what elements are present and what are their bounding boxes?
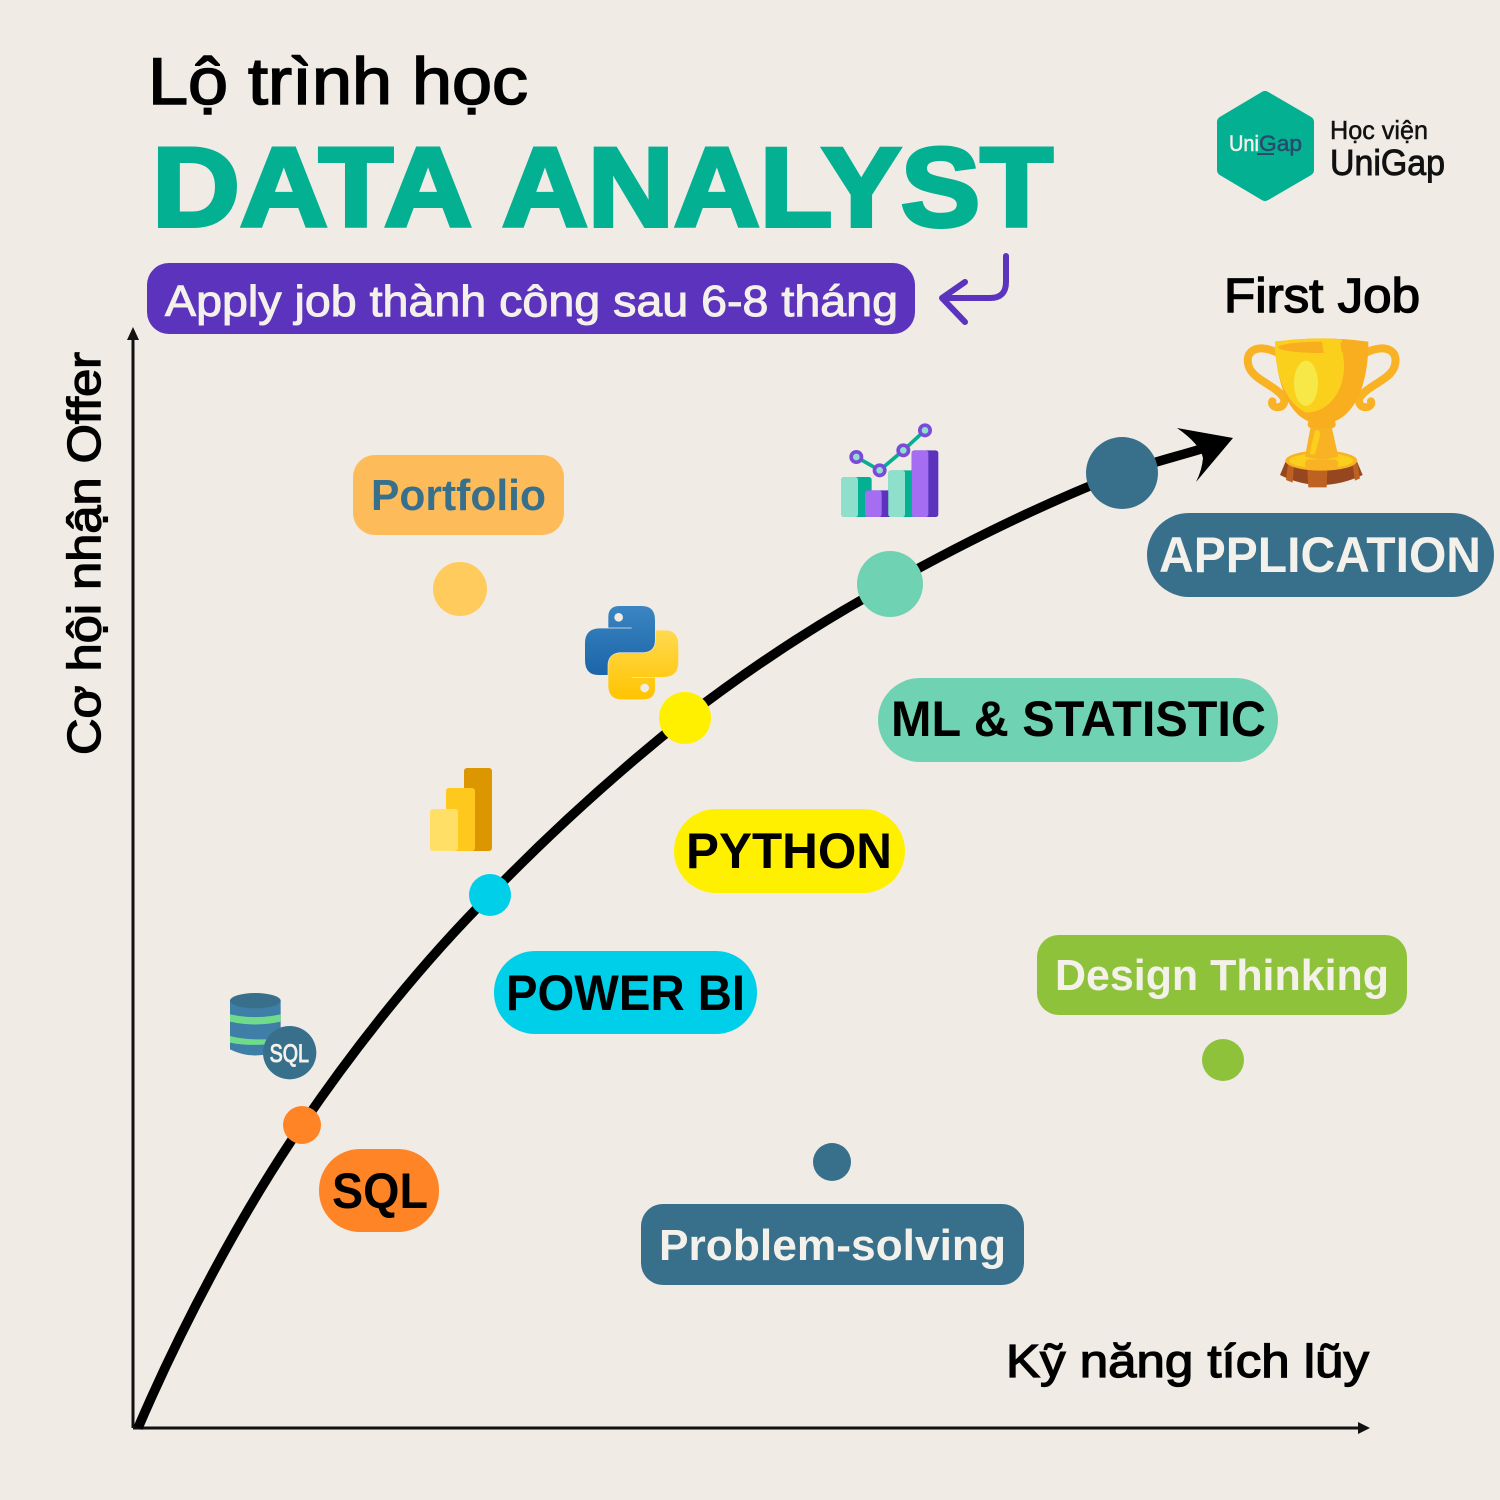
- soft skill: Problem-solving: Problem-solving: [659, 1221, 1006, 1270]
- label: ML & STATISTIC: [878, 678, 1278, 762]
- node: Power BI: [430, 768, 757, 1034]
- icon: Python: [585, 606, 678, 699]
- label: PYTHON: [674, 809, 905, 893]
- label: PYTHON: PYTHON: [686, 823, 892, 879]
- node: SQL: [230, 993, 439, 1232]
- arrowhead: [1177, 428, 1233, 482]
- growth curve arrow: [138, 428, 1233, 1428]
- logo: UniGap: UniGap: [1330, 142, 1445, 183]
- callout: apply job: [147, 263, 915, 334]
- y axis label: Cơ hội nhận Offer: [58, 352, 110, 755]
- label: SQL: [319, 1149, 439, 1232]
- label: POWER BI: [494, 951, 757, 1034]
- icon: trophy: [1248, 338, 1396, 487]
- node: ML and Statistic: [841, 423, 1278, 762]
- x axis label: Kỹ năng tích lũy: [1006, 1335, 1369, 1387]
- soft skill: Design Thinking: [1037, 935, 1407, 1081]
- title: [148, 44, 1053, 250]
- logo: UniGap: Gap: [1259, 131, 1302, 156]
- label: POWER BI: POWER BI: [506, 965, 745, 1021]
- y axis: [58, 327, 139, 1428]
- label: SQL: SQL: [332, 1163, 428, 1219]
- heading: First Job: First Job: [1224, 270, 1420, 323]
- arrow: return arrow: [942, 256, 1006, 322]
- callout: apply job: Apply job thành công sau 6-8 tháng: [165, 277, 898, 326]
- label: ML & STATISTIC: ML & STATISTIC: [891, 691, 1266, 747]
- soft skill: Portfolio: [353, 455, 564, 616]
- icon: hexagon badge: [1223, 97, 1308, 195]
- icon: SQL database: SQL: [270, 1040, 309, 1068]
- soft skill: Problem-solving: [641, 1143, 1024, 1285]
- label: APPLICATION: APPLICATION: [1159, 527, 1481, 583]
- soft skill: Design Thinking: Design Thinking: [1055, 951, 1389, 1000]
- soft skill: Portfolio: Portfolio: [371, 471, 546, 520]
- icon: SQL database: [230, 993, 316, 1079]
- logo: UniGap: [1223, 97, 1445, 195]
- node: Python: [585, 606, 905, 893]
- title line: ANALYST: ANALYST: [502, 125, 1053, 250]
- node: Application: [1086, 437, 1494, 597]
- title line: Lộ trình học: Lộ trình học: [148, 44, 528, 118]
- icon: chart: [841, 423, 938, 517]
- icon: Power BI: [430, 768, 492, 851]
- logo: UniGap: Uni: [1229, 131, 1259, 156]
- label: APPLICATION: [1147, 513, 1494, 597]
- x axis: [133, 1335, 1370, 1434]
- logo: UniGap: Học viện: [1330, 115, 1428, 145]
- title line: DATA: DATA: [152, 125, 472, 250]
